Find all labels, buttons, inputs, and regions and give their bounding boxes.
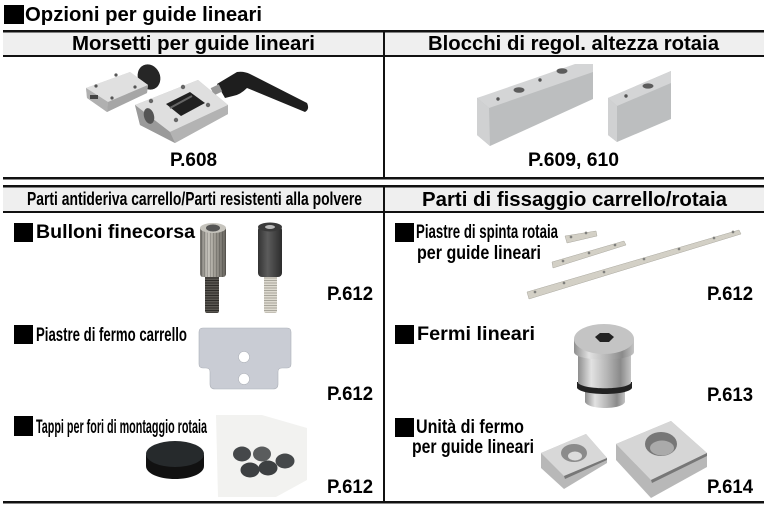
image: rail push plates: [527, 230, 741, 299]
heading: Morsetti: Morsetti per guide lineari: [72, 32, 315, 55]
label: Unità di fermo: Unità di fermo: [416, 416, 524, 438]
label: Fermi lineari: Fermi lineari: [417, 323, 535, 345]
label: P.612 push plates: P.612: [707, 283, 753, 305]
label: P.612 plate: P.612: [327, 383, 373, 405]
label: P.608: P.608: [170, 149, 217, 171]
label: P.609, 610: P.609, 610: [528, 149, 619, 171]
image: rail mounting hole caps: [146, 415, 307, 497]
label: Piastre di spinta: Piastre di spinta rotaia: [416, 221, 558, 243]
image: linear guide clamp: [86, 61, 308, 143]
heading: Parti antideriva: Parti antideriva carrello/Parti resistenti alla polvere: [27, 188, 362, 209]
heading: Blocchi: Blocchi di regol. altezza rotaia: [428, 32, 720, 55]
label: P.612 bolts: P.612: [327, 283, 373, 305]
label: Piastre di spinta: per guide lineari: [417, 242, 541, 264]
image: stopper units for linear guides: [541, 421, 707, 498]
label: Unità di fermo: per guide lineari: [412, 436, 534, 458]
label: Bulloni finecorsa: Bulloni finecorsa: [36, 221, 195, 243]
label: P.613: P.613: [707, 384, 753, 406]
heading: Parti di fissaggio: Parti di fissaggio carrello/rotaia: [422, 189, 728, 211]
label: Tappi: Tappi per fori di montaggio rotaia: [36, 417, 207, 438]
label: Piastre di fermo carrello: Piastre di fermo carrello: [36, 325, 187, 346]
image: rail height adjustment blocks: [477, 64, 671, 146]
label: P.614: P.614: [707, 476, 753, 498]
panel: bottom row: [3, 185, 764, 504]
panel: top row: [3, 30, 764, 180]
image: carriage stop plate: [199, 328, 291, 389]
label: Piastre di fermo carrello: [14, 325, 187, 346]
label: P.612 caps: P.612: [327, 476, 373, 498]
image: linear stopper: [574, 324, 634, 408]
label: Piastre di spinta: [395, 221, 558, 264]
label: Unità di fermo: [395, 416, 534, 458]
label: Tappi: [14, 416, 207, 438]
image: stopper bolts: [200, 222, 282, 313]
title: Opzioni per guide lineari: [25, 3, 262, 26]
